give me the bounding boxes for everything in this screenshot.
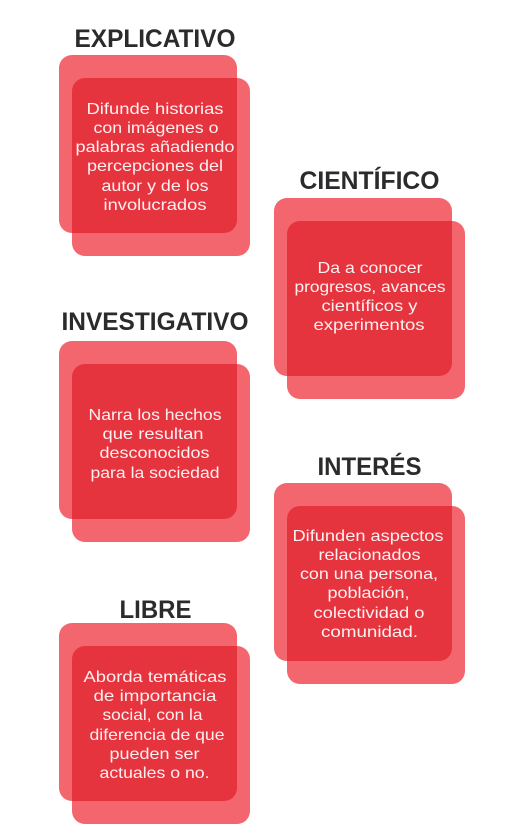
text block: científico	[294, 260, 446, 334]
card overlap: libre	[72, 646, 237, 801]
text block: científico: Da a conocer	[318, 260, 423, 277]
text block: libre: diferencia de que	[90, 727, 225, 744]
card overlap: interés	[287, 506, 452, 661]
text block: explicativo: autor y de los	[102, 178, 208, 195]
text block: interés: relacionados	[318, 547, 420, 564]
text block: interés	[292, 528, 444, 641]
text block: libre: Aborda temáticas	[84, 669, 226, 686]
text block: científico: experimentos	[314, 317, 424, 334]
text block: investigativo: Narra los hechos	[88, 407, 222, 424]
text block: libre: pueden ser	[110, 746, 200, 763]
heading: interés: INTERÉS	[318, 452, 422, 481]
heading: explicativo: EXPLICATIVO	[74, 25, 236, 53]
text block: explicativo: involucrados	[104, 197, 206, 214]
card back: investigativo	[59, 341, 237, 519]
panel: interés	[274, 452, 465, 684]
card back: explicativo	[59, 55, 237, 233]
card front: libre	[72, 646, 250, 824]
text block: interés: con una persona,	[300, 566, 438, 583]
card overlap: explicativo	[72, 78, 237, 233]
card back: libre	[59, 623, 237, 801]
text block: investigativo: para la sociedad	[90, 465, 220, 482]
text block: explicativo: Difunde historias	[86, 101, 224, 118]
text block: libre: social, con la	[102, 707, 203, 724]
text block: explicativo: percepciones del	[87, 158, 223, 175]
panel: explicativo	[59, 25, 250, 256]
heading: científico: CIENTÍFICO	[300, 166, 440, 195]
text block: interés: Difunden aspectos	[292, 528, 444, 545]
text block: investigativo: desconocidos	[100, 445, 210, 462]
panel: científico	[274, 166, 465, 399]
panel: libre	[59, 596, 250, 824]
card back: científico	[274, 198, 452, 376]
card front: explicativo	[72, 78, 250, 256]
text block: explicativo: con imágenes o	[94, 120, 219, 137]
card front: interés	[287, 506, 465, 684]
text block: interés: comunidad.	[321, 624, 418, 641]
text block: libre: actuales o no.	[100, 765, 210, 782]
text block: explicativo: palabras añadiendo	[76, 139, 235, 156]
text block: libre	[84, 669, 226, 782]
heading: libre: LIBRE	[120, 596, 192, 624]
text block: interés: población,	[328, 585, 410, 602]
heading: investigativo: INVESTIGATIVO	[62, 308, 248, 336]
card overlap: científico	[287, 221, 452, 376]
text block: explicativo	[76, 101, 235, 214]
text block: investigativo: que resultan	[102, 426, 204, 443]
text block: libre: de importancia	[94, 688, 217, 705]
card overlap: investigativo	[72, 364, 237, 519]
card back: interés	[274, 483, 452, 661]
text block: interés: colectividad o	[314, 605, 425, 622]
text block: científico: progresos, avances	[294, 279, 446, 296]
text block: científico: científicos y	[322, 298, 418, 315]
card front: científico	[287, 221, 465, 399]
card front: investigativo	[72, 364, 250, 542]
text block: investigativo	[88, 407, 222, 482]
panel: investigativo	[59, 308, 250, 542]
